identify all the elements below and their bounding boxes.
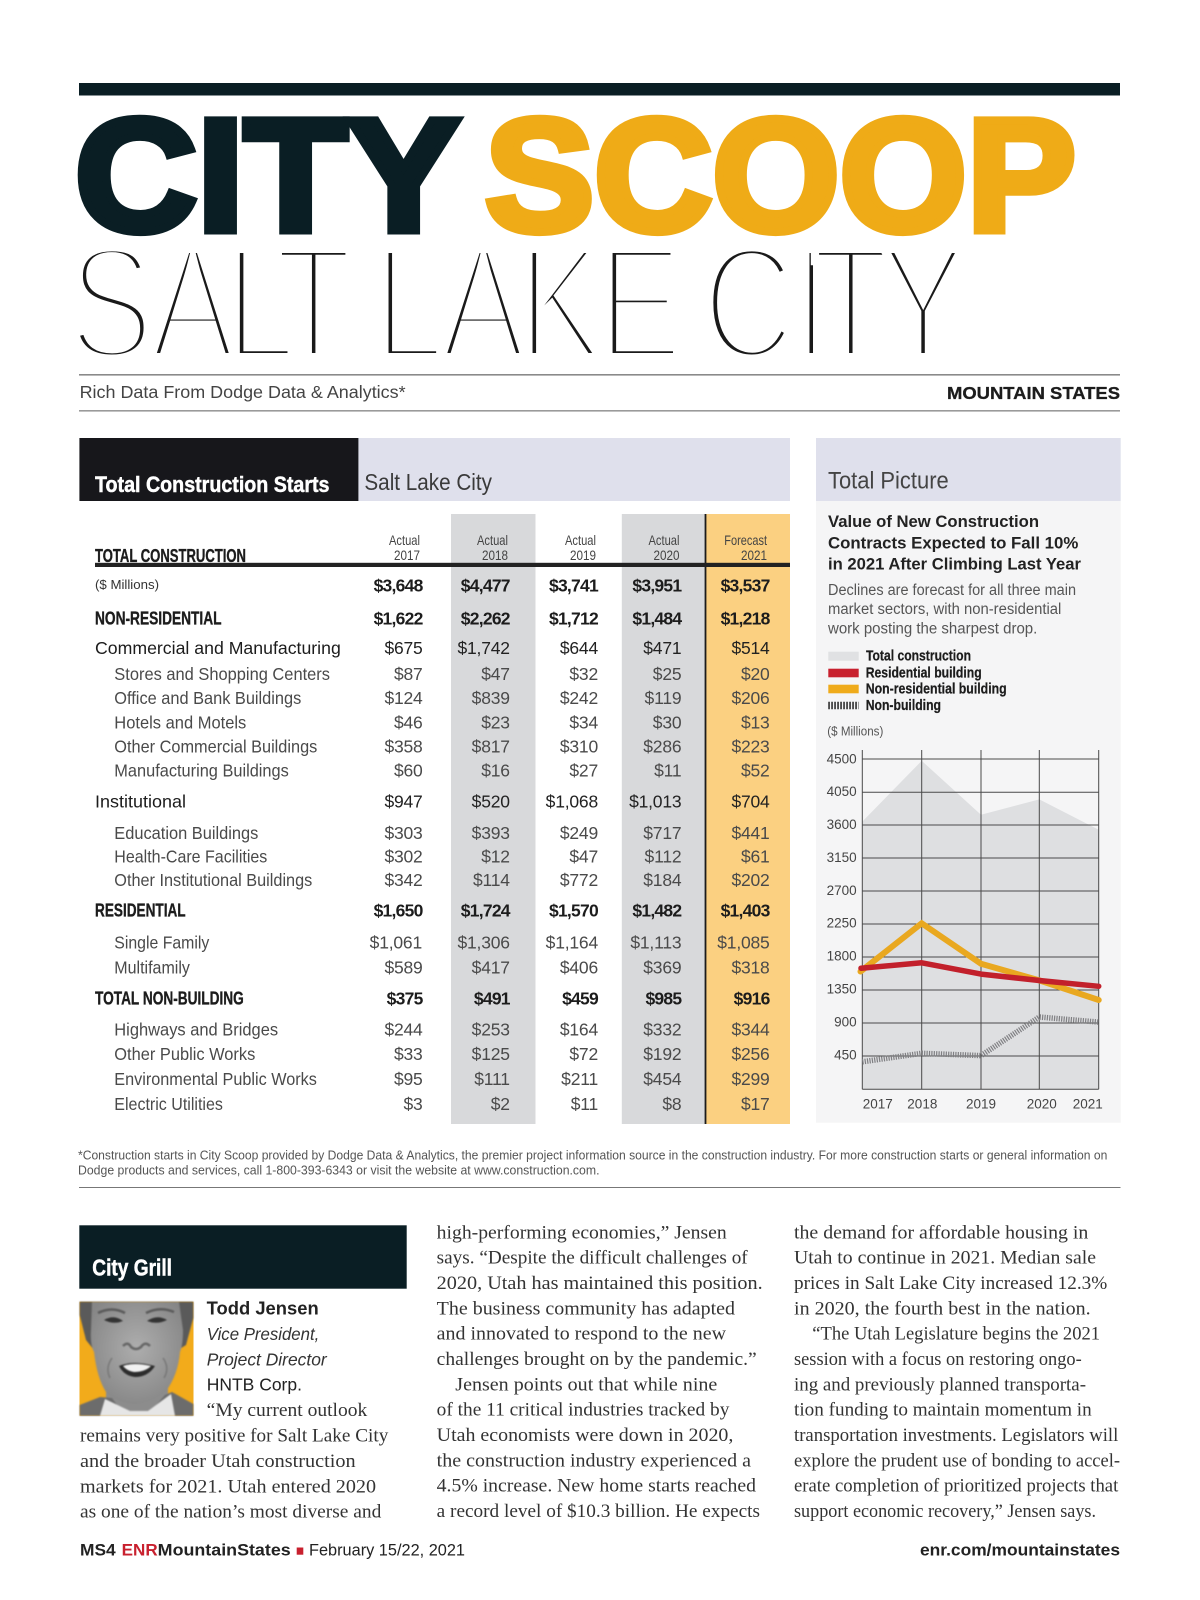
row: environmental bbox=[114, 1069, 770, 1089]
row: multifamily: $589 bbox=[384, 957, 423, 977]
article column 2: of the 11 critical industries tracked by bbox=[437, 1400, 730, 1421]
y axis labels: 4500 bbox=[827, 751, 857, 766]
row: other institutional: $184 bbox=[643, 870, 682, 890]
row: electric: $3 bbox=[404, 1094, 423, 1114]
table header band bbox=[79, 438, 790, 501]
row: electric: $17 bbox=[741, 1094, 770, 1114]
page footer: enr.com/mountainstates bbox=[920, 1540, 1120, 1559]
y axis labels: 3150 bbox=[827, 850, 857, 865]
row: hotels: $23 bbox=[481, 712, 510, 732]
row: total construction: $3,537 bbox=[721, 575, 770, 595]
row: environmental: $454 bbox=[643, 1069, 682, 1089]
article column 2: Jensen points out that while nine bbox=[455, 1374, 717, 1395]
y axis labels bbox=[827, 751, 857, 1062]
row: other public works: $256 bbox=[731, 1044, 770, 1064]
page footer: MountainStates bbox=[158, 1540, 291, 1559]
footnote: *Construction starts in City Scoop provided by Dodge Data & Analytics, the premier project information source in the construction industry. For more construction starts or general information on bbox=[78, 1148, 1107, 1162]
chart description bbox=[827, 582, 1076, 637]
row: non-residential: $1,622 bbox=[374, 608, 424, 628]
article column 3: the demand for affordable housing in bbox=[794, 1222, 1089, 1243]
panel: city grill heading: City Grill bbox=[92, 1255, 172, 1281]
row: single family: $1,113 bbox=[630, 932, 681, 952]
row: total non-building bbox=[95, 988, 771, 1008]
series: non-residential building bbox=[860, 923, 1099, 1000]
row: non-residential: $1,484 bbox=[632, 608, 682, 628]
subtitle strip: Rich Data From Dodge Data & Analytics* bbox=[80, 382, 406, 402]
row: single family: $1,306 bbox=[457, 932, 510, 952]
article column 3: session with a focus on restoring ongo- bbox=[794, 1349, 1082, 1370]
row: health-care: Health-Care Facilities bbox=[114, 846, 268, 866]
row: total non-building: $375 bbox=[387, 988, 424, 1008]
row: total construction: $3,648 bbox=[374, 575, 424, 595]
row: health-care: $47 bbox=[569, 846, 598, 866]
row: residential bbox=[95, 901, 771, 921]
article column 1: and the broader Utah construction bbox=[80, 1451, 356, 1472]
row: commercial and manufacturing: $1,742 bbox=[457, 638, 510, 658]
row: other commercial: Other Commercial Buildings bbox=[114, 737, 318, 757]
row: environmental: $211 bbox=[561, 1069, 598, 1089]
article column 1: markets for 2021. Utah entered 2020 bbox=[80, 1476, 376, 1497]
y axis labels: 450 bbox=[834, 1047, 857, 1062]
row: stores: $32 bbox=[569, 664, 598, 684]
chart headline bbox=[828, 512, 1082, 573]
title: City Scoop: SCOOP bbox=[485, 86, 1076, 264]
series: non-building bbox=[862, 1017, 1099, 1062]
row: education: $441 bbox=[731, 823, 770, 843]
row: other commercial bbox=[114, 737, 770, 757]
row: other commercial: $286 bbox=[643, 737, 681, 757]
row: residential: $1,724 bbox=[461, 901, 511, 921]
title: City Scoop: CITY bbox=[75, 86, 460, 264]
row: residential: $1,482 bbox=[632, 901, 682, 921]
chart headline: Value of New Construction bbox=[828, 512, 1039, 531]
y axis labels: 3600 bbox=[827, 817, 857, 832]
article column 2: Utah economists were down in 2020, bbox=[437, 1425, 733, 1446]
row: commercial and manufacturing: Commercial and Manufacturing bbox=[95, 638, 341, 658]
row: hotels: Hotels and Motels bbox=[114, 712, 247, 732]
row: manufacturing bbox=[114, 761, 770, 781]
row: residential: $1,403 bbox=[721, 901, 771, 921]
column headings: Actual bbox=[648, 532, 680, 548]
row: electric: Electric Utilities bbox=[114, 1094, 223, 1114]
row: multifamily: $369 bbox=[643, 957, 681, 977]
article column 1: as one of the nation’s most diverse and bbox=[80, 1502, 382, 1523]
row: single family: $1,061 bbox=[370, 932, 422, 952]
article column 2: a record level of $10.3 billion. He expects bbox=[437, 1501, 760, 1522]
row: institutional: Institutional bbox=[95, 792, 186, 812]
article column 2: says. “Despite the difficult challenges of bbox=[437, 1248, 748, 1269]
row: institutional: $1,068 bbox=[546, 792, 598, 812]
row: other institutional: $202 bbox=[731, 870, 770, 890]
row: manufacturing: $11 bbox=[654, 761, 681, 781]
row: highways: $253 bbox=[472, 1019, 510, 1039]
row: single family: $1,085 bbox=[717, 932, 770, 952]
row: commercial and manufacturing: $471 bbox=[643, 638, 681, 658]
row: other institutional: $114 bbox=[473, 870, 510, 890]
row: electric: $2 bbox=[491, 1094, 510, 1114]
row: other public works: $33 bbox=[394, 1044, 423, 1064]
y axis labels: 1800 bbox=[827, 949, 857, 964]
row: environmental: Environmental Public Works bbox=[114, 1069, 317, 1089]
legend: Non-residential building bbox=[866, 681, 1007, 697]
row: residential: RESIDENTIAL bbox=[95, 901, 186, 921]
row: other institutional: $342 bbox=[384, 870, 423, 890]
row: highways: $332 bbox=[643, 1019, 681, 1039]
column headings: Actual bbox=[389, 532, 420, 548]
row: hotels: $34 bbox=[569, 712, 598, 732]
article column 3: explore the prudent use of bonding to accel- bbox=[794, 1450, 1120, 1471]
x axis labels: 2020 bbox=[1027, 1097, 1057, 1112]
row: stores: $20 bbox=[741, 664, 770, 684]
row: total non-building: TOTAL NON-BUILDING bbox=[95, 988, 244, 1008]
y axis labels: 2700 bbox=[827, 883, 857, 898]
article column 3: support economic recovery,” Jensen says. bbox=[794, 1501, 1096, 1522]
article column 1 bbox=[80, 1400, 389, 1523]
article column 3: erate completion of prioritized projects that bbox=[794, 1476, 1119, 1497]
row: office: $119 bbox=[645, 688, 681, 708]
y axis labels: 1350 bbox=[827, 982, 857, 997]
row: health-care: $61 bbox=[741, 846, 770, 866]
x axis labels: 2018 bbox=[907, 1097, 937, 1112]
row: manufacturing: $60 bbox=[394, 761, 423, 781]
row: total construction: $3,951 bbox=[632, 575, 682, 595]
footnote bbox=[78, 1148, 1120, 1188]
x axis labels: 2019 bbox=[966, 1097, 996, 1112]
row: single family bbox=[114, 932, 770, 952]
byline: Vice President, bbox=[207, 1324, 319, 1344]
column headings: Actual bbox=[477, 532, 508, 548]
row: education bbox=[114, 823, 770, 843]
row: commercial and manufacturing bbox=[95, 638, 770, 658]
article column 2: challenges brought on by the pandemic.” bbox=[437, 1349, 757, 1370]
row: multifamily: $318 bbox=[731, 957, 770, 977]
page footer: February 15/22, 2021 bbox=[309, 1540, 465, 1559]
row: other institutional bbox=[114, 870, 770, 890]
legend: Non-building bbox=[866, 698, 941, 714]
row: health-care: $302 bbox=[384, 846, 423, 866]
row: highways: $244 bbox=[384, 1019, 423, 1039]
row: total non-building: $916 bbox=[734, 988, 771, 1008]
series: residential building bbox=[861, 963, 1099, 986]
row: hotels: $13 bbox=[741, 712, 770, 732]
row: institutional bbox=[95, 792, 770, 812]
chart headline: in 2021 After Climbing Last Year bbox=[828, 554, 1082, 573]
y axis labels: 900 bbox=[834, 1015, 857, 1030]
article column 2: and innovated to respond to the new bbox=[437, 1324, 726, 1345]
column headings: 2018 bbox=[482, 547, 508, 563]
row: manufacturing: $52 bbox=[741, 761, 770, 781]
table header band: Total Construction Starts bbox=[95, 472, 330, 497]
row: highways: $344 bbox=[731, 1019, 770, 1039]
row: stores bbox=[114, 664, 770, 684]
article column 1: “My current outlook bbox=[207, 1400, 368, 1421]
row: education: $393 bbox=[472, 823, 510, 843]
article column 2 bbox=[437, 1222, 763, 1522]
row: commercial and manufacturing: $644 bbox=[560, 638, 598, 658]
byline: HNTB Corp. bbox=[207, 1375, 302, 1395]
column headings: 2019 bbox=[570, 547, 596, 563]
page footer: ENR bbox=[122, 1540, 158, 1559]
column headings: Actual bbox=[565, 532, 596, 548]
article column 2: high-performing economies,” Jensen bbox=[437, 1222, 727, 1243]
row: manufacturing: Manufacturing Buildings bbox=[114, 761, 289, 781]
row: stores: $87 bbox=[394, 664, 423, 684]
column headings: 2020 bbox=[654, 547, 680, 563]
row: other commercial: $223 bbox=[731, 737, 770, 757]
article column 2: 4.5% increase. New home starts reached bbox=[437, 1476, 757, 1497]
row: electric bbox=[114, 1094, 770, 1114]
row: other public works bbox=[114, 1044, 770, 1064]
x axis labels bbox=[863, 1097, 1103, 1112]
row: other public works: Other Public Works bbox=[114, 1044, 256, 1064]
table header band: Salt Lake City bbox=[364, 469, 492, 495]
article column 3: Utah to continue in 2021. Median sale bbox=[794, 1248, 1096, 1269]
article column 3: “The Utah Legislature begins the 2021 bbox=[812, 1324, 1100, 1345]
page footer bbox=[80, 1540, 1120, 1559]
row: other public works: $192 bbox=[643, 1044, 681, 1064]
chart headline: Contracts Expected to Fall 10% bbox=[828, 533, 1078, 552]
article column 3: tion funding to maintain momentum in bbox=[794, 1400, 1092, 1421]
row: hotels: $30 bbox=[653, 712, 682, 732]
line chart bbox=[827, 750, 1103, 1112]
chart description: Declines are forecast for all three main bbox=[828, 582, 1076, 599]
panel: city grill heading bbox=[79, 1225, 407, 1289]
row: other institutional: $772 bbox=[560, 870, 598, 890]
row: other public works: $72 bbox=[569, 1044, 598, 1064]
row: commercial and manufacturing: $675 bbox=[384, 638, 423, 658]
article column 3: in 2020, the fourth best in the nation. bbox=[794, 1298, 1091, 1319]
subtitle strip: MOUNTAIN STATES bbox=[947, 383, 1120, 403]
row: hotels: $46 bbox=[394, 712, 423, 732]
chart description: work posting the sharpest drop. bbox=[827, 620, 1037, 637]
row: multifamily: $417 bbox=[472, 957, 510, 977]
row: stores: $47 bbox=[481, 664, 510, 684]
row: other commercial: $310 bbox=[560, 737, 598, 757]
footnote: Dodge products and services, call 1-800-393-6343 or visit the website at www.construction.com. bbox=[78, 1164, 600, 1178]
article column 1: remains very positive for Salt Lake City bbox=[80, 1426, 389, 1447]
row: education: Education Buildings bbox=[114, 823, 259, 843]
subtitle strip bbox=[79, 374, 1120, 412]
row: office: Office and Bank Buildings bbox=[114, 688, 302, 708]
panel heading: Total Picture bbox=[828, 468, 949, 495]
row: total construction: $4,477 bbox=[461, 575, 510, 595]
article column 3: transportation investments. Legislators will bbox=[794, 1425, 1118, 1446]
row: manufacturing: $27 bbox=[569, 761, 598, 781]
title: Salt Lake City: SALT LAKE CITY bbox=[69, 213, 965, 393]
column shading bbox=[451, 514, 790, 1124]
row: other commercial: $817 bbox=[472, 737, 510, 757]
row: institutional: $947 bbox=[384, 792, 423, 812]
row: education: $717 bbox=[643, 823, 681, 843]
article column 3 bbox=[794, 1222, 1120, 1522]
chart description: market sectors, with non-residential bbox=[828, 601, 1061, 618]
row: stores: Stores and Shopping Centers bbox=[114, 664, 330, 684]
row: total construction: $3,741 bbox=[549, 575, 599, 595]
row: residential: $1,650 bbox=[374, 901, 424, 921]
portrait photo bbox=[80, 1302, 194, 1416]
row: total construction: TOTAL CONSTRUCTION bbox=[95, 546, 246, 566]
row: environmental: $299 bbox=[731, 1069, 770, 1089]
chart unit label: ($ Millions) bbox=[827, 724, 883, 739]
x axis labels: 2017 bbox=[863, 1097, 893, 1112]
row: health-care bbox=[114, 846, 770, 866]
row: environmental: $95 bbox=[394, 1069, 423, 1089]
row: institutional: $520 bbox=[472, 792, 510, 812]
row: office: $124 bbox=[384, 688, 423, 708]
row: total non-building: $985 bbox=[645, 988, 682, 1008]
panel: total construction starts table bbox=[79, 438, 790, 1124]
byline: Project Director bbox=[207, 1349, 328, 1369]
row: highways: $164 bbox=[560, 1019, 598, 1039]
row: total construction: ($ Millions) bbox=[95, 577, 159, 592]
row: office: $206 bbox=[731, 688, 770, 708]
article column 3: ing and previously planned transporta- bbox=[794, 1374, 1086, 1395]
row: commercial and manufacturing: $514 bbox=[731, 638, 770, 658]
column headings: 2017 bbox=[394, 547, 420, 563]
row: education: $303 bbox=[384, 823, 423, 843]
column headings bbox=[389, 532, 767, 563]
x axis labels: 2021 bbox=[1073, 1097, 1103, 1112]
page footer: MS4 bbox=[80, 1540, 116, 1559]
row: multifamily bbox=[114, 957, 770, 977]
row: other public works: $125 bbox=[472, 1044, 510, 1064]
row: non-residential: NON-RESIDENTIAL bbox=[95, 608, 222, 628]
row: residential: $1,570 bbox=[549, 901, 599, 921]
row: multifamily: $406 bbox=[560, 957, 598, 977]
legend: Residential building bbox=[866, 665, 982, 681]
legend: Total construction bbox=[866, 648, 971, 664]
y axis labels: 2250 bbox=[827, 916, 857, 931]
legend bbox=[828, 648, 1007, 714]
row: hotels bbox=[114, 712, 770, 732]
article column 2: 2020, Utah has maintained this position. bbox=[437, 1273, 763, 1294]
row: single family: $1,164 bbox=[546, 932, 598, 952]
top bar bbox=[79, 83, 1120, 96]
row: education: $249 bbox=[560, 823, 598, 843]
row: total construction bbox=[95, 546, 790, 595]
row: electric: $8 bbox=[662, 1094, 681, 1114]
row: other commercial: $358 bbox=[384, 737, 423, 757]
article column 2: the construction industry experienced a bbox=[437, 1450, 752, 1471]
row: manufacturing: $16 bbox=[481, 761, 510, 781]
row: office: $242 bbox=[560, 688, 598, 708]
row: total non-building: $491 bbox=[474, 988, 511, 1008]
row: highways: Highways and Bridges bbox=[114, 1019, 278, 1039]
column headings: 2021 bbox=[741, 547, 767, 563]
row: non-residential bbox=[95, 608, 771, 628]
article column 3: prices in Salt Lake City increased 12.3% bbox=[794, 1273, 1107, 1294]
row: multifamily: Multifamily bbox=[114, 957, 190, 977]
row: highways bbox=[114, 1019, 770, 1039]
panel: total picture bbox=[816, 438, 1121, 1123]
row: institutional: $704 bbox=[731, 792, 770, 812]
row: environmental: $111 bbox=[474, 1069, 510, 1089]
row: single family: Single Family bbox=[114, 932, 210, 952]
title: City Scoop bbox=[75, 86, 1076, 264]
row: office: $839 bbox=[472, 688, 510, 708]
row: health-care: $12 bbox=[481, 846, 510, 866]
row: total non-building: $459 bbox=[562, 988, 599, 1008]
byline: Todd Jensen bbox=[207, 1298, 319, 1318]
row: office bbox=[114, 688, 770, 708]
row: stores: $25 bbox=[653, 664, 681, 684]
y axis labels: 4050 bbox=[827, 784, 857, 799]
row: non-residential: $1,218 bbox=[721, 608, 771, 628]
byline bbox=[207, 1298, 328, 1395]
row: electric: $11 bbox=[571, 1094, 598, 1114]
row: health-care: $112 bbox=[645, 846, 681, 866]
row: institutional: $1,013 bbox=[629, 792, 681, 812]
row: other institutional: Other Institutional Buildings bbox=[114, 870, 313, 890]
row: non-residential: $2,262 bbox=[461, 608, 511, 628]
column headings: Forecast bbox=[724, 532, 767, 548]
article column 2: The business community has adapted bbox=[437, 1298, 736, 1319]
row: non-residential: $1,712 bbox=[549, 608, 599, 628]
